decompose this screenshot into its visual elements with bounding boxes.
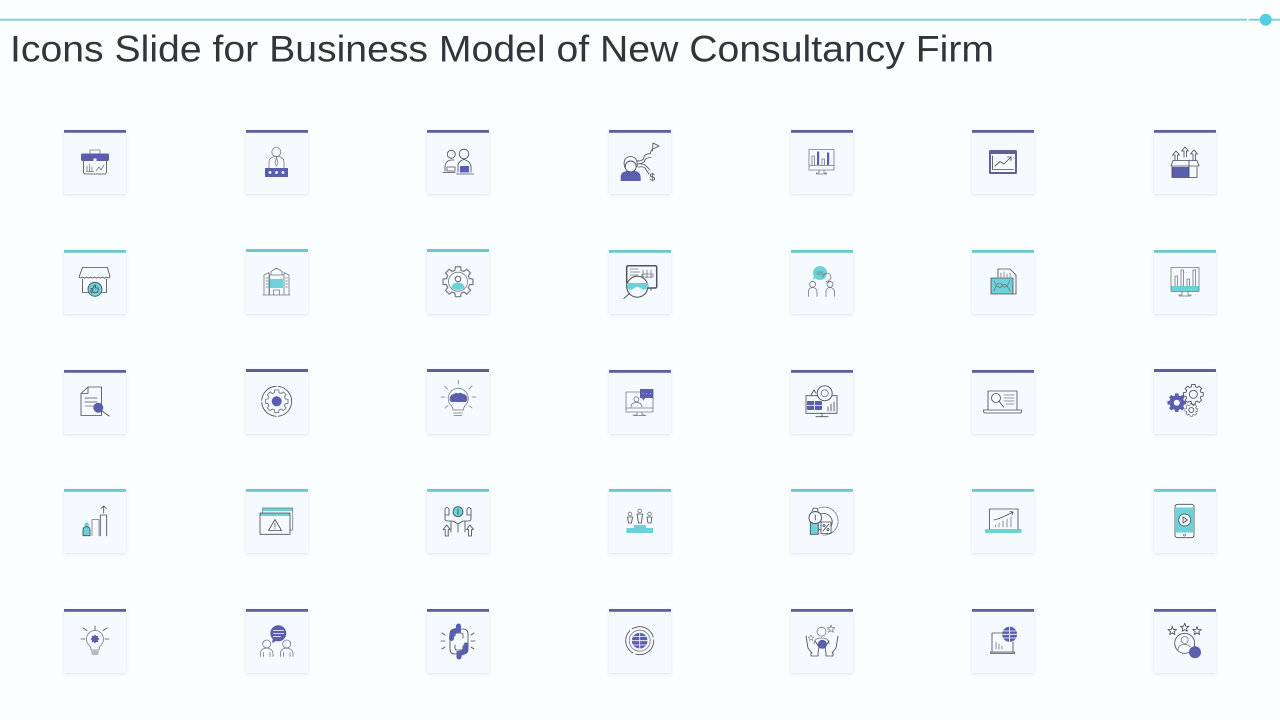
icon: team money: [443, 507, 474, 536]
icon: global report: [990, 627, 1017, 653]
card: monitor with globe and chart: [791, 370, 853, 434]
icon: browser trend: [989, 150, 1017, 174]
card: person with rating plate: [246, 130, 308, 194]
title: Icons Slide for Business Model of New Consultancy Firm: [10, 29, 994, 70]
icon: mobile video: [1175, 504, 1194, 538]
card: person with percent dial: [791, 489, 853, 553]
card: office building: [246, 249, 308, 314]
icon: globe ring: [626, 627, 654, 655]
card: star rating with person: [1154, 609, 1216, 673]
icon: money gear: [262, 386, 292, 416]
icon: laptop profile: [984, 391, 1021, 413]
icon: data monitor: [806, 386, 837, 417]
card: documents and chart folder: [972, 250, 1034, 314]
icon: gears: [1167, 384, 1203, 416]
icon: conversation: [260, 625, 293, 656]
icon: monitor chart: [1171, 268, 1199, 296]
card: person with decision paths: [609, 130, 671, 194]
card: two people with chat bubble: [246, 609, 308, 673]
card: document search: [64, 370, 126, 434]
card: window trend chart: [972, 130, 1034, 194]
icon: building: [263, 268, 290, 295]
icon: rated person: [265, 148, 288, 177]
icon: discussion: [808, 266, 834, 296]
icon: video chat: [626, 389, 653, 416]
icon: decision person: $: [650, 172, 656, 184]
icon: warning browser: [260, 508, 293, 534]
card: video consultation monitor: [609, 370, 671, 434]
card: phone with video: [1154, 489, 1216, 553]
card: three gears: [1154, 369, 1216, 434]
card: shop with thumbs up: [64, 250, 126, 314]
icon: monitor chart: [809, 150, 834, 174]
icon: storefront: [79, 268, 110, 296]
card: gear with person: [427, 249, 489, 314]
header rule with dot: [0, 14, 1280, 26]
card: lightbulb with brain: [427, 369, 489, 434]
card: hands holding person: [791, 609, 853, 673]
icon: podium: [626, 509, 653, 533]
icon: idea brain: [441, 380, 476, 416]
card: podium with three figures: [609, 489, 671, 553]
icon: finance dial: [809, 507, 838, 535]
icon: gear person: [443, 267, 473, 297]
card: lightbulb with gear: [64, 609, 126, 673]
icon: briefcase: [81, 150, 109, 174]
card: two people at laptops: [427, 130, 489, 194]
card: teal monitor bar chart: [1154, 250, 1216, 314]
icon: consultants: [443, 149, 474, 174]
card: laptop with globe: [972, 609, 1034, 673]
card: monitor bar chart: [791, 130, 853, 194]
card: briefcase with charts: [64, 130, 126, 194]
icon: laptop chart: [985, 509, 1022, 533]
card: warning windows: [246, 489, 308, 553]
card: gear in ring with coin: [246, 369, 308, 434]
icon: report folder: [991, 269, 1016, 294]
card: laptop with profile search: [972, 370, 1034, 434]
icon: rated profile: [1168, 623, 1201, 658]
icon: chain link: [441, 626, 475, 657]
card: person with growing bars: [64, 489, 126, 553]
icon: screen analysis: [624, 266, 657, 298]
card: people thinking together: [791, 250, 853, 314]
icon: document magnifier: [81, 387, 109, 416]
card: chain links: [427, 609, 489, 673]
icon: caring hands: [806, 625, 838, 656]
card: monitor with magnifier: [609, 250, 671, 314]
icon: growth box: [1171, 147, 1199, 178]
icon: bulb gear: [81, 626, 109, 654]
card: box with rising arrows: [1154, 130, 1216, 194]
card: globe in ring: [609, 609, 671, 673]
icon: person growth: [83, 506, 107, 536]
card: laptop growth chart: [972, 489, 1034, 553]
card: team with money goal: [427, 489, 489, 553]
